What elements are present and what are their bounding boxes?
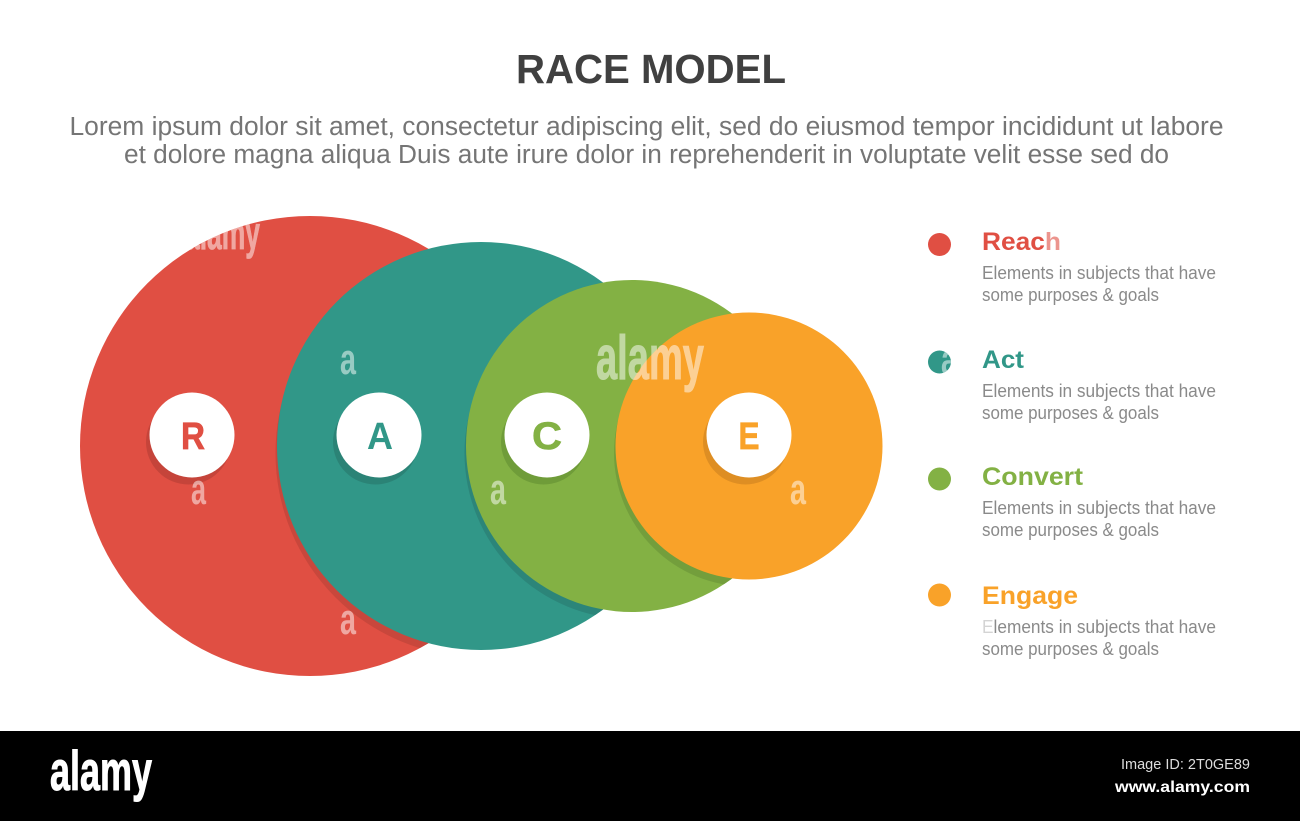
circle: Reach [80,216,429,676]
legend: Reach: Elements in subjects that have [982,263,1216,283]
legend: Act: Elements in subjects that have [982,381,1216,401]
watermark: central alamy: alamy [596,324,704,393]
badge: E [703,392,792,484]
watermark: small marks: a [191,465,206,514]
legend: Convert: Elements in subjects that have [982,498,1216,518]
image id: Image ID: 2T0GE89 [1121,756,1250,773]
watermark: small marks: a [790,465,806,514]
legend: Reach: Reach [982,228,1061,256]
circle: Convert [466,280,732,612]
badge: R: R [181,416,205,458]
subtitle text [70,113,1224,169]
legend: Engage: some purposes & goals [982,639,1159,659]
title: RACE MODEL [516,46,786,92]
subtitle text: et dolore magna aliqua Duis aute irure dolor in reprehenderit in voluptate velit esse sed do [124,141,1169,169]
legend: Act: a [941,335,957,384]
legend: Engage [928,582,1216,659]
watermark: small marks: a [340,335,356,384]
badge: A [333,392,422,484]
watermark: small marks [191,335,806,644]
legend: Act: some purposes & goals [982,403,1159,423]
circle: Act [277,242,604,650]
site url: www.alamy.com [1114,779,1250,796]
legend: Act [928,350,1216,423]
legend: Convert: Convert [982,463,1084,491]
overlapping circles diagram [80,216,882,676]
circle: Engage [616,312,882,580]
legend: Reach: some purposes & goals [982,285,1159,305]
badge: C [501,392,590,484]
watermark: small marks: a [490,465,506,514]
legend: Engage: Engage [982,582,1078,610]
watermark: top alamy: alamy [185,207,260,259]
footer bar [0,731,1300,821]
badge: R [146,392,234,484]
legend: Convert: some purposes & goals [982,520,1159,540]
subtitle text: Lorem ipsum dolor sit amet, consectetur adipiscing elit, sed do eiusmod tempor incididunt ut labore [70,113,1224,141]
legend: Reach [928,228,1216,305]
watermark: small marks: a [340,595,356,644]
legend: Engage: Elements in subjects that have [982,617,1216,637]
badge: A: A [367,416,393,458]
legend: Act: Act [982,346,1025,374]
legend: Convert [928,463,1216,540]
footer logo: alamy [50,739,152,802]
badge: E: E [738,416,760,458]
badge: C: C [532,415,562,458]
